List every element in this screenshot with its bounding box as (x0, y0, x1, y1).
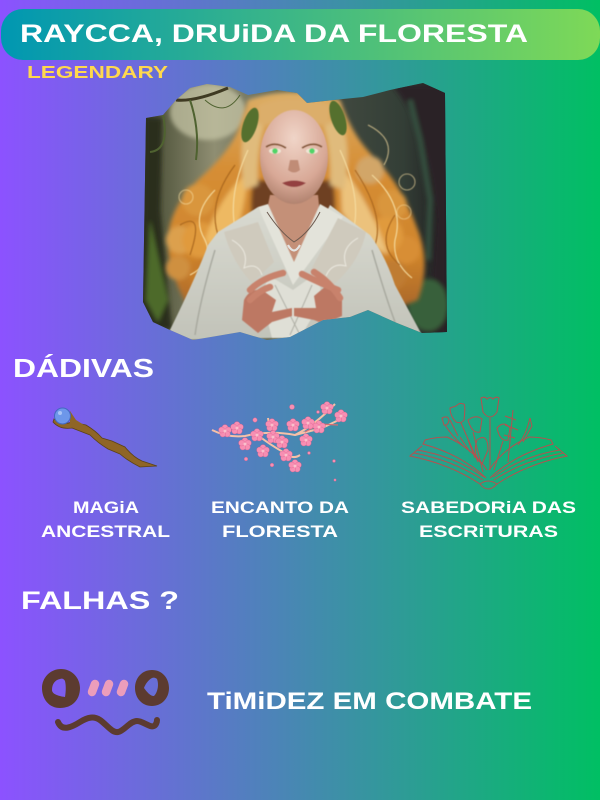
label: magic: ANCESTRAL (41, 523, 170, 541)
portrait: druid in forest (140, 80, 450, 345)
icon: shy kawaii face (42, 669, 169, 732)
face (260, 110, 328, 204)
heading: gifts: DÁDIVAS (13, 353, 154, 383)
label: charm (211, 499, 349, 541)
necklace (267, 212, 320, 250)
label: wisdom: SABEDORiA DAS (401, 499, 576, 517)
gift: wisdom of the scriptures (401, 397, 576, 541)
label: charm: FLORESTA (222, 523, 338, 541)
gift: ancestral magic (41, 408, 170, 541)
icon: cherry blossom branch (212, 402, 347, 481)
icon: open book with flowers (410, 397, 567, 489)
label: wisdom (401, 499, 576, 541)
heading: flaws: FALHAS ? (21, 587, 179, 615)
rarity label: LEGENDARY (27, 62, 168, 82)
title banner: RAYCCA, DRUiDA DA FLORESTA (20, 20, 528, 48)
icon: wooden staff (53, 408, 157, 467)
hair leaf crown (240, 100, 348, 143)
neck (268, 194, 320, 262)
hands (242, 272, 342, 333)
label: wisdom: ESCRiTURAS (419, 523, 558, 541)
label: magic: MAGiA (73, 499, 139, 517)
robe (165, 204, 422, 340)
gift: forest charm (211, 402, 349, 541)
label: charm: ENCANTO DA (211, 499, 349, 517)
label: magic (41, 499, 170, 541)
branch and vines (150, 88, 240, 160)
flaw text: TiMiDEZ EM COMBATE (207, 688, 532, 715)
hair (166, 92, 425, 310)
title banner (1, 9, 600, 60)
